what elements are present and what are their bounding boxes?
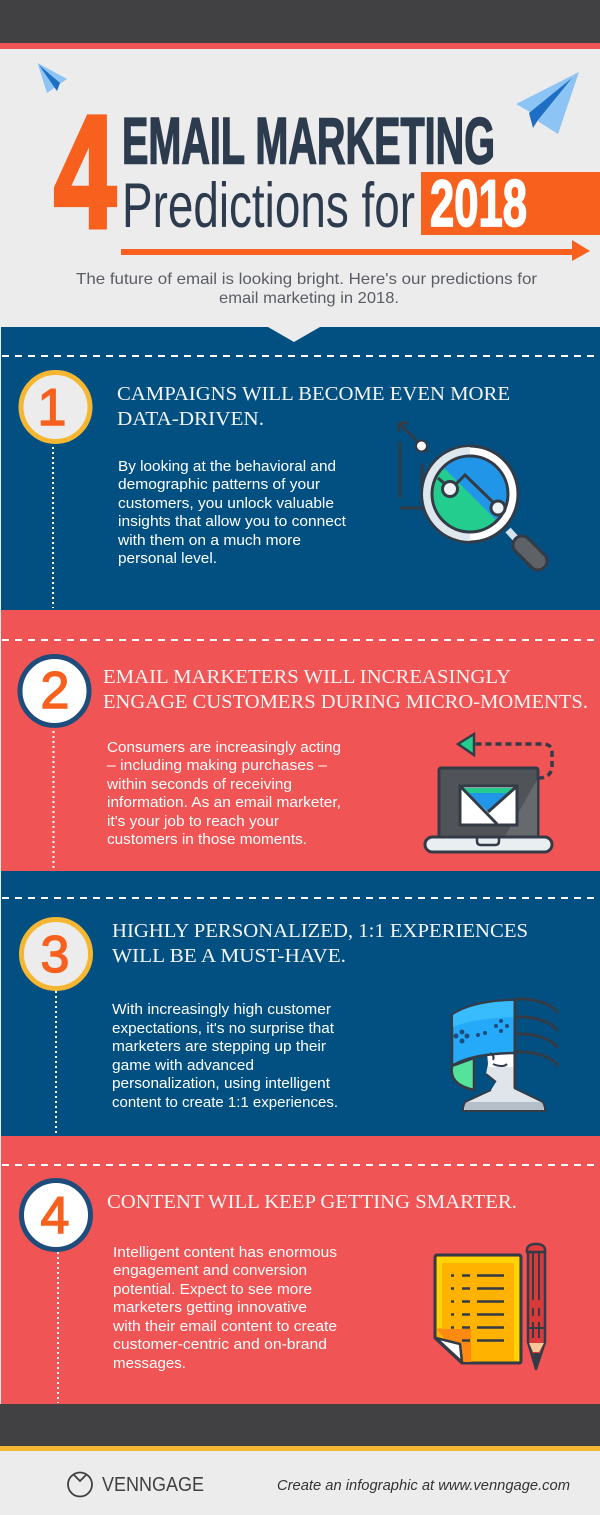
body text 4: engagement and conversion xyxy=(113,1263,307,1279)
heading 1 xyxy=(117,383,510,430)
body text 3: personalization, using intelligent xyxy=(112,1076,330,1092)
body text 4: marketers getting innovative xyxy=(113,1300,307,1316)
body text 2 xyxy=(106,740,341,848)
bottom bar xyxy=(0,1404,600,1451)
body text 4: Intelligent content has enormous xyxy=(113,1245,337,1261)
panel 2: micro-moments xyxy=(1,610,600,871)
number badge 2 xyxy=(20,656,89,726)
top header bar xyxy=(0,0,600,49)
arrow under title xyxy=(121,240,590,261)
subtitle: email marketing in 2018. xyxy=(219,290,399,307)
heading 1: DATA-DRIVEN. xyxy=(117,408,264,430)
heading 2: EMAIL MARKETERS WILL INCREASINGLY xyxy=(103,666,511,688)
title: 2018 xyxy=(430,166,527,240)
body text 3: With increasingly high customer xyxy=(112,1002,331,1018)
number badge 3 xyxy=(22,920,90,988)
icon: head with personalization band xyxy=(452,999,558,1111)
body text 1 xyxy=(117,459,346,567)
body text 3: expectations, it's no surprise that xyxy=(112,1021,334,1037)
body text 4: with their email content to create xyxy=(112,1319,337,1335)
body text 3: game with advanced xyxy=(112,1058,254,1074)
heading 2 xyxy=(103,666,588,713)
body text 2: within seconds of receiving xyxy=(106,777,292,793)
body text 1: insights that allow you to connect xyxy=(118,514,346,530)
body text 1: demographic patterns of your xyxy=(118,477,320,493)
number badge 3: 3 xyxy=(41,926,69,984)
body text 4: messages. xyxy=(113,1356,186,1372)
number badge 1: 1 xyxy=(38,379,66,437)
heading 2: ENGAGE CUSTOMERS DURING MICRO-MOMENTS. xyxy=(103,691,588,713)
icon: laptop with email xyxy=(425,734,552,852)
icon: small paper plane xyxy=(38,63,67,93)
body text 4: customer-centric and on-brand xyxy=(113,1337,327,1353)
body text 1: personal level. xyxy=(118,551,217,567)
subtitle: The future of email is looking bright. Here's our predictions for xyxy=(76,271,538,288)
icon: large paper plane xyxy=(516,72,579,134)
body text 2: information. As an email marketer, xyxy=(107,795,341,811)
body text 4: potential. Expect to see more xyxy=(113,1282,312,1298)
panel 3: personalized experiences xyxy=(1,871,600,1136)
body text 1: By looking at the behavioral and xyxy=(118,459,336,475)
body text 2: Consumers are increasingly acting xyxy=(107,740,341,756)
body text 1: customers, you unlock valuable xyxy=(118,496,334,512)
title: 4 xyxy=(54,82,116,261)
panel 1: data-driven campaigns xyxy=(1,327,600,610)
number badge 1 xyxy=(21,372,90,442)
body text 3 xyxy=(112,1002,338,1111)
body text 4 xyxy=(112,1245,337,1372)
footer call to action: Create an infographic at www.venngage.com xyxy=(277,1477,570,1494)
body text 2: customers in those moments. xyxy=(107,832,307,848)
subtitle xyxy=(76,271,538,307)
body text 3: content to create 1:1 experiences. xyxy=(112,1095,338,1111)
number badge 2: 2 xyxy=(41,662,69,720)
body text 3: marketers are stepping up their xyxy=(112,1039,326,1055)
footer logo xyxy=(68,1472,204,1496)
number badge 4 xyxy=(22,1180,90,1250)
number badge 4: 4 xyxy=(41,1187,69,1245)
title: Predictions for xyxy=(122,171,415,241)
body text 2: – including making purchases – xyxy=(107,758,328,774)
panel 4: smarter content xyxy=(1,1136,600,1404)
heading 3 xyxy=(112,920,528,967)
heading 4: CONTENT WILL KEEP GETTING SMARTER. xyxy=(107,1191,517,1213)
icon: magnifying glass over chart xyxy=(399,423,538,561)
heading 1: CAMPAIGNS WILL BECOME EVEN MORE xyxy=(117,383,510,405)
footer logo: VENNGAGE xyxy=(102,1474,204,1496)
heading 3: WILL BE A MUST-HAVE. xyxy=(112,945,346,967)
heading 3: HIGHLY PERSONALIZED, 1:1 EXPERIENCES xyxy=(112,920,528,942)
body text 2: it's your job to reach your xyxy=(107,814,279,830)
icon: notepad and pencil xyxy=(435,1244,545,1369)
title xyxy=(54,82,600,261)
body text 1: with them on a much more xyxy=(117,533,301,549)
